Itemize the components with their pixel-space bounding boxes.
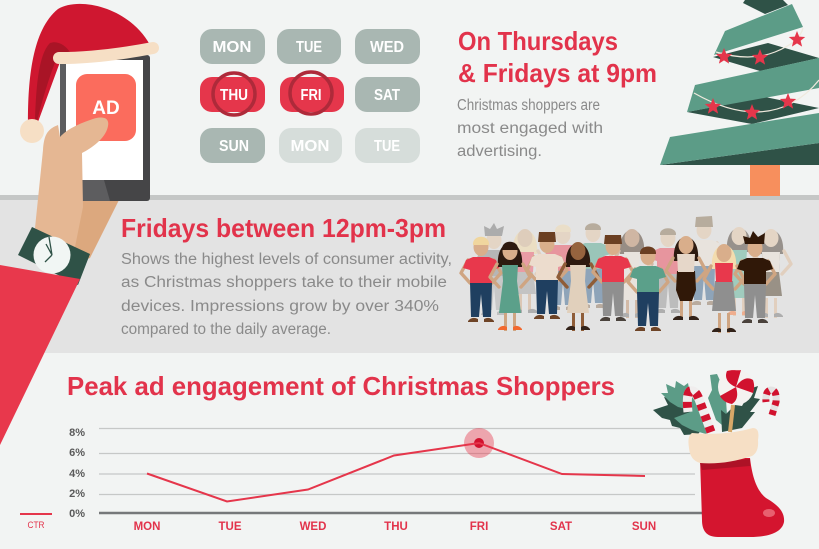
front row people (461, 231, 775, 333)
heading: thursdays and fridays: On Thursdays (458, 26, 618, 56)
text block: consumer activity: compared to the daily average. (121, 321, 331, 338)
text block: consumer activity: as Christmas shoppers take to their mobile (121, 274, 447, 291)
y axis labels: 6% (69, 447, 85, 459)
palm behind phone (60, 130, 120, 270)
x axis labels: SAT (550, 521, 572, 533)
x axis labels (134, 521, 656, 533)
text block: consumer activity: Shows the highest levels of consumer activity, (121, 251, 452, 268)
pill row 1 (200, 29, 420, 64)
x axis labels: THU (384, 521, 408, 533)
heading: thursdays and fridays: & Fridays at 9pm (458, 58, 657, 88)
christmas stocking (653, 369, 784, 537)
CTR line (147, 443, 645, 502)
highlight marker friday (464, 428, 494, 458)
pill row 2 with highlighted days: FRI (300, 87, 322, 104)
x axis labels: FRI (470, 521, 488, 533)
hand and thumb (35, 118, 108, 262)
x axis labels: SUN (632, 521, 656, 533)
more greenery (708, 374, 760, 432)
legend: CTR (28, 520, 45, 530)
crowd of shoppers (461, 216, 791, 333)
lollipop (718, 369, 754, 432)
text block: engagement: advertising. (457, 143, 542, 160)
day pills calendar (200, 29, 420, 163)
text block: engagement: Christmas shoppers are (457, 97, 600, 114)
garland stars (705, 31, 805, 120)
text block: engagement: most engaged with (457, 120, 603, 137)
heading: peak ad engagement: Peak ad engagement of Christmas Shoppers (67, 371, 615, 401)
grid lines (99, 428, 695, 494)
cuff (688, 428, 758, 463)
x axis labels: MON (134, 521, 160, 533)
phone (60, 55, 150, 201)
heading: fridays between: Fridays between 12pm-3pm (121, 213, 446, 243)
candy canes (687, 390, 776, 432)
x axis labels: WED (300, 521, 326, 533)
pill row 2 with highlighted days: THU (220, 87, 248, 104)
pill row 1: WED (370, 39, 404, 56)
pill row 3: MON (290, 138, 330, 155)
sock body (700, 458, 784, 537)
text block: consumer activity (121, 251, 452, 338)
sleeve (0, 265, 80, 445)
x axis labels: TUE (218, 521, 242, 533)
greenery (653, 381, 712, 435)
text block: engagement (457, 97, 603, 160)
arm and hand holding phone (0, 55, 150, 445)
pill row 1: TUE (296, 39, 322, 56)
line chart: CTR by day (20, 427, 702, 533)
santa hat (20, 4, 153, 143)
watch (18, 227, 90, 285)
heading: thursdays and fridays (458, 26, 657, 88)
y axis labels: 2% (69, 488, 85, 500)
phone: AD (92, 98, 120, 119)
pill row 1: MON (212, 39, 252, 56)
y axis labels: 0% (69, 508, 85, 520)
panel: friday band (0, 195, 819, 353)
pill row 2 with highlighted days: SAT (374, 87, 400, 104)
ad tile (76, 74, 136, 141)
pill row 3 (200, 128, 420, 163)
legend (20, 514, 52, 530)
y axis labels (69, 427, 85, 520)
pill row 3: TUE (374, 138, 400, 155)
pill row 3: SUN (219, 138, 249, 155)
y axis labels: 4% (69, 468, 85, 480)
back row people (474, 216, 791, 318)
christmas tree (660, 0, 819, 196)
y axis labels: 8% (69, 427, 85, 439)
text block: consumer activity: devices. Impressions grow by over 340% (121, 298, 439, 315)
garland strings (694, 28, 819, 112)
pill row 2 with highlighted days (200, 72, 420, 115)
